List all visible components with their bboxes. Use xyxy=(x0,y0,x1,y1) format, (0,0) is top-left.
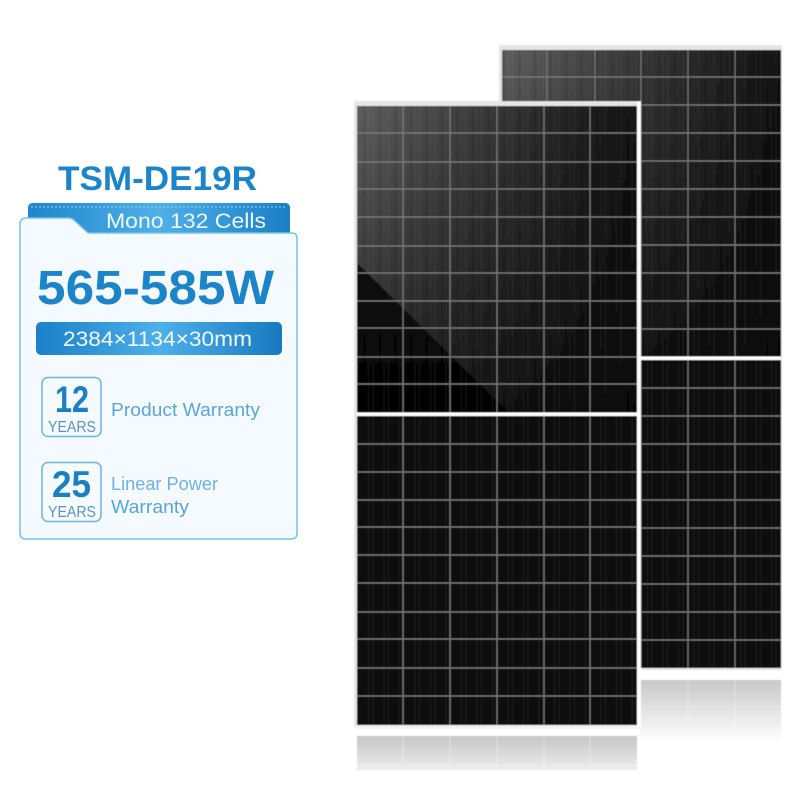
front module reflection xyxy=(357,736,637,770)
rear module reflection xyxy=(640,680,781,742)
panel: front solar module xyxy=(354,101,641,770)
badge: 12 years: 12 xyxy=(55,379,89,420)
badge: 12 years xyxy=(42,378,101,436)
card body xyxy=(20,218,297,539)
label: linear power warranty: Linear Power xyxy=(111,474,218,494)
panel: rear solar module xyxy=(499,45,782,742)
panel: spec card xyxy=(20,203,297,539)
label: linear power warranty: Warranty xyxy=(111,497,189,517)
power range: 565-585W xyxy=(37,262,275,315)
badge: 12 years: YEARS xyxy=(48,419,96,436)
label: product warranty: Product Warranty xyxy=(111,400,260,420)
dimensions bar xyxy=(36,322,282,355)
dimensions bar: 2384×1134×30mm xyxy=(63,328,252,351)
badge: 25 years: YEARS xyxy=(48,504,96,521)
title: TSM-DE19R xyxy=(58,160,257,198)
card back tab xyxy=(28,203,290,235)
label: linear power warranty xyxy=(111,474,218,517)
badge: 25 years xyxy=(42,462,101,522)
tab label: Mono 132 Cells xyxy=(106,210,266,233)
badge: 25 years: 25 xyxy=(52,464,91,505)
